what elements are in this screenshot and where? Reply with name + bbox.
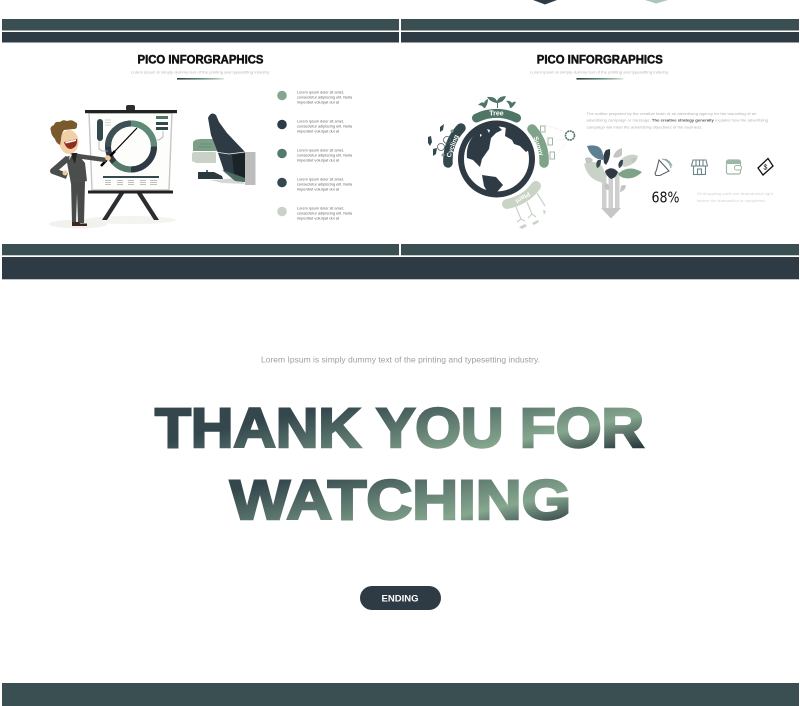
title underline <box>576 78 624 80</box>
list item 4: consectetur adipiscing elit. Nulla <box>297 182 353 186</box>
list item 2 <box>277 119 353 133</box>
list item 1: Lorem ipsum dolor sit amet, <box>297 90 344 94</box>
description paragraph: campaign will meet the advertising objectives of the business. <box>586 126 702 130</box>
list item 3: Lorem ipsum dolor sit amet, <box>297 148 344 152</box>
illustration: globe with labelled arcs <box>428 96 574 229</box>
statistic caption: Of shopping carts are abandoned right <box>697 192 774 196</box>
icon: cyclists <box>428 124 454 156</box>
icon: banknote: $ <box>764 164 768 172</box>
heading: left slide: PICO INFORGRAPHICS <box>138 52 264 66</box>
subtitle: right slide: Lorem ipsum is simply dummy text of the printing and typesetting industry. <box>530 70 669 74</box>
arc: Tree <box>476 110 516 118</box>
globe <box>461 124 532 194</box>
arc: Tree: Tree <box>489 110 504 118</box>
chart: donut on the board <box>108 124 154 170</box>
headline: thank you for watching <box>155 396 644 531</box>
icon: megaphone <box>655 159 672 176</box>
arc: Plant: Plant <box>513 190 531 205</box>
headline: thank you for watching: WATCHING <box>230 468 571 531</box>
top header bars <box>2 19 799 42</box>
description paragraph: The outline prepared by the creative team of an advertising agency for the launching of an <box>586 112 756 116</box>
panel: right slide <box>428 52 774 229</box>
list item 5 <box>277 206 353 220</box>
button: ending <box>360 586 441 610</box>
illustration: presenter <box>49 120 111 228</box>
list item 5: Lorem ipsum dolor sit amet, <box>297 206 344 210</box>
footer bar <box>2 683 799 706</box>
list item 4: Lorem ipsum dolor sit amet, <box>297 177 344 181</box>
list item 4 <box>277 177 353 191</box>
list: five bullet items <box>277 90 353 220</box>
list item 2: consectetur adipiscing elit. Nulla <box>297 124 353 128</box>
list item 3: imperdiet volutpat dui at <box>297 158 340 162</box>
icon: roots <box>516 193 546 229</box>
list item 3: consectetur adipiscing elit. Nulla <box>297 153 353 157</box>
panel: thank you slide <box>155 354 644 610</box>
illustration: pencil tree <box>584 145 642 218</box>
panel: left slide <box>49 52 353 228</box>
lower bars of slides <box>2 244 799 279</box>
list item 2: Lorem ipsum dolor sit amet, <box>297 119 344 123</box>
statistic caption: before the transaction is completed. <box>697 199 766 203</box>
arc: Sunny <box>532 129 545 163</box>
list item 4: imperdiet volutpat dui at <box>297 187 340 191</box>
statistic: 68%: 68% <box>652 188 680 206</box>
icon: banknote <box>758 158 773 175</box>
list item 3 <box>277 148 353 162</box>
heading: right slide: PICO INFORGRAPHICS <box>537 52 663 66</box>
icon: wallet <box>726 160 742 174</box>
list item 1: consectetur adipiscing elit. Nulla <box>297 95 353 99</box>
arc: Plant <box>507 186 536 205</box>
icon: sun and plants <box>540 125 574 159</box>
title underline <box>177 78 224 80</box>
icon: shop <box>692 160 708 174</box>
icon: sprouts <box>478 96 516 108</box>
arc: Cycling: Cycling <box>446 134 460 159</box>
headline: thank you for watching: THANK YOU FOR <box>155 396 644 459</box>
tagline: Lorem Ipsum is simply dummy text of the printing and typesetting industry. <box>261 354 540 364</box>
button: ending: ENDING <box>382 594 418 604</box>
pointer stick <box>101 151 115 166</box>
list item 2: imperdiet volutpat dui at <box>297 129 340 133</box>
list item 5: consectetur adipiscing elit. Nulla <box>297 211 353 215</box>
cropped shapes from previous slide <box>533 0 668 4</box>
list item 1 <box>277 90 353 104</box>
description paragraph: advertising campaign or message. The creative strategy generally explains how the advertising <box>586 119 763 123</box>
list item 5: imperdiet volutpat dui at <box>297 216 340 220</box>
arc: Cycling <box>446 128 461 163</box>
illustration: presentation board <box>84 105 177 224</box>
illustration: thumbs up hand <box>192 114 256 185</box>
arc: Sunny: Sunny <box>532 136 545 157</box>
list item 1: imperdiet volutpat dui at <box>297 100 340 104</box>
subtitle: left slide: Lorem ipsum is simply dummy text of the printing and typesetting industry. <box>131 70 270 74</box>
